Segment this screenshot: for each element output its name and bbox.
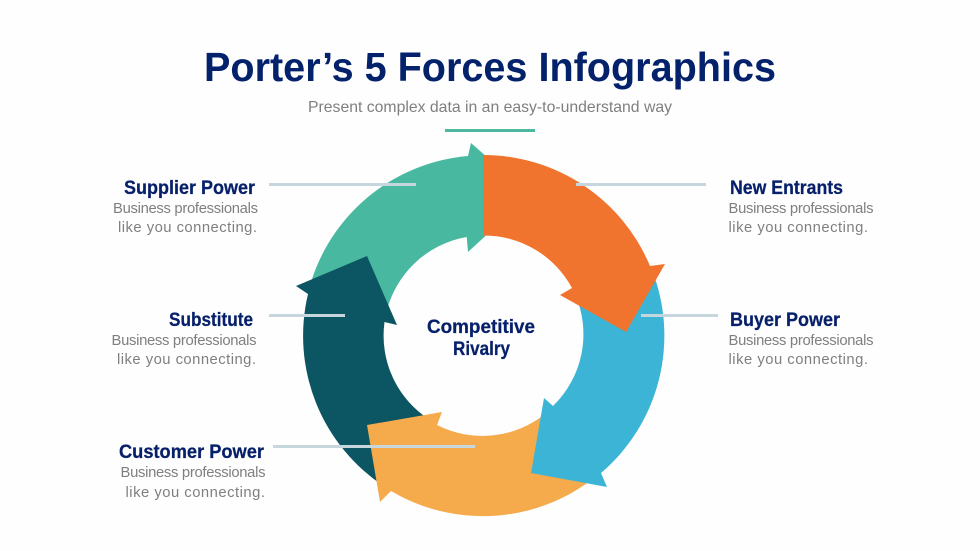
text block: supplier power: Supplier Power xyxy=(124,178,256,199)
text block: supplier power xyxy=(113,178,258,236)
text block: buyer power xyxy=(728,310,874,368)
connector: supplier power xyxy=(269,183,416,186)
subtitle: Present complex data in an easy-to-understand way xyxy=(308,99,672,116)
arrow: new entrants xyxy=(484,155,665,332)
connector: substitute xyxy=(269,314,345,317)
connector: new entrants xyxy=(576,183,706,186)
cycle diagram xyxy=(296,143,665,516)
text block: substitute: like you connecting. xyxy=(117,352,256,368)
text block: buyer power: Business professionals xyxy=(728,333,874,349)
center label: competitive rivalry: Competitive xyxy=(427,317,535,338)
text block: new entrants: Business professionals xyxy=(728,201,874,217)
text block: supplier power: Business professionals xyxy=(113,201,258,217)
text block: customer power: like you connecting. xyxy=(126,485,265,501)
text block: new entrants xyxy=(728,178,874,236)
text block: customer power: Business professionals xyxy=(120,465,266,481)
text block: substitute: Substitute xyxy=(169,310,253,331)
connector: buyer power xyxy=(641,314,718,317)
title: Porter’s 5 Forces Infographics xyxy=(204,44,776,90)
text block: customer power: Customer Power xyxy=(119,442,265,463)
text block: supplier power: like you connecting. xyxy=(118,220,257,236)
connector: customer power xyxy=(273,445,475,448)
text block: new entrants: New Entrants xyxy=(730,178,843,199)
text block: new entrants: like you connecting. xyxy=(728,220,868,236)
title accent bar xyxy=(445,129,535,132)
arrow: supplier power xyxy=(312,143,530,314)
text block: substitute: Business professionals xyxy=(112,333,256,349)
text block: substitute xyxy=(112,310,256,368)
text block: buyer power: Buyer Power xyxy=(730,310,841,331)
center label: competitive rivalry: Rivalry xyxy=(453,339,510,360)
text block: buyer power: like you connecting. xyxy=(728,352,868,368)
text block: customer power xyxy=(119,442,266,501)
center label: competitive rivalry xyxy=(427,317,535,360)
arrow: buyer power xyxy=(531,270,664,487)
arrow: customer power xyxy=(367,412,592,516)
arrow: substitute xyxy=(296,256,430,487)
